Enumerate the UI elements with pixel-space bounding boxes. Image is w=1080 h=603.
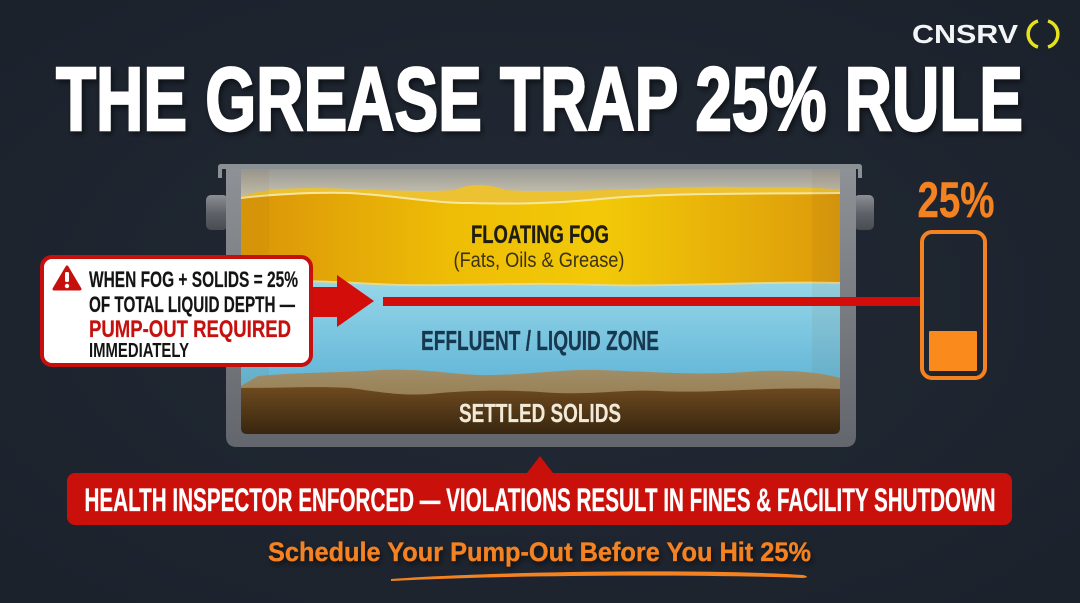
tank lid	[218, 164, 862, 178]
logo: CNSRV: CNSRV	[912, 19, 1019, 49]
settled solids layer	[241, 387, 840, 434]
logo: CNSRV	[912, 19, 1058, 49]
grease trap tank	[206, 164, 874, 447]
gauge fill	[929, 331, 977, 371]
air gap	[241, 169, 840, 201]
label: settled solids: SETTLED SOLIDS	[459, 398, 621, 428]
gauge: 25 percent	[918, 172, 994, 378]
label: fats, oils and grease: (Fats, Oils & Grease)	[454, 249, 624, 272]
gauge outline	[922, 232, 985, 378]
gauge label: 25%	[918, 172, 994, 228]
banner: enforcement warning	[67, 456, 1012, 525]
call to action: Schedule Your Pump-Out Before You Hit 25%	[268, 537, 811, 567]
call to action	[268, 537, 811, 581]
icon: warning triangle	[54, 267, 80, 289]
callout text	[89, 267, 298, 362]
arrow	[310, 275, 374, 327]
oil surface highlight	[241, 193, 840, 204]
inner wall shading right	[812, 169, 840, 395]
oil and water boundary	[241, 281, 840, 285]
oil layer: floating FOG	[241, 193, 840, 292]
callout text: WHEN FOG + SOLIDS = 25%	[89, 267, 298, 292]
inner wall shading left	[241, 169, 269, 395]
icon: inlet pipe	[206, 195, 228, 230]
sand layer	[241, 370, 840, 410]
water layer: effluent	[241, 281, 840, 395]
red level line	[383, 297, 921, 306]
oil back surface	[241, 185, 840, 210]
tank shell	[226, 168, 856, 447]
label: floating FOG: FLOATING FOG	[471, 221, 609, 249]
callout	[42, 257, 311, 365]
callout text: IMMEDIATELY	[89, 340, 189, 362]
underline swoosh	[391, 571, 807, 581]
callout text: PUMP-OUT REQUIRED	[89, 316, 291, 343]
icon: outlet pipe	[854, 195, 874, 230]
callout text: OF TOTAL LIQUID DEPTH —	[89, 292, 295, 317]
label: effluent: EFFLUENT / LIQUID ZONE	[421, 325, 659, 356]
